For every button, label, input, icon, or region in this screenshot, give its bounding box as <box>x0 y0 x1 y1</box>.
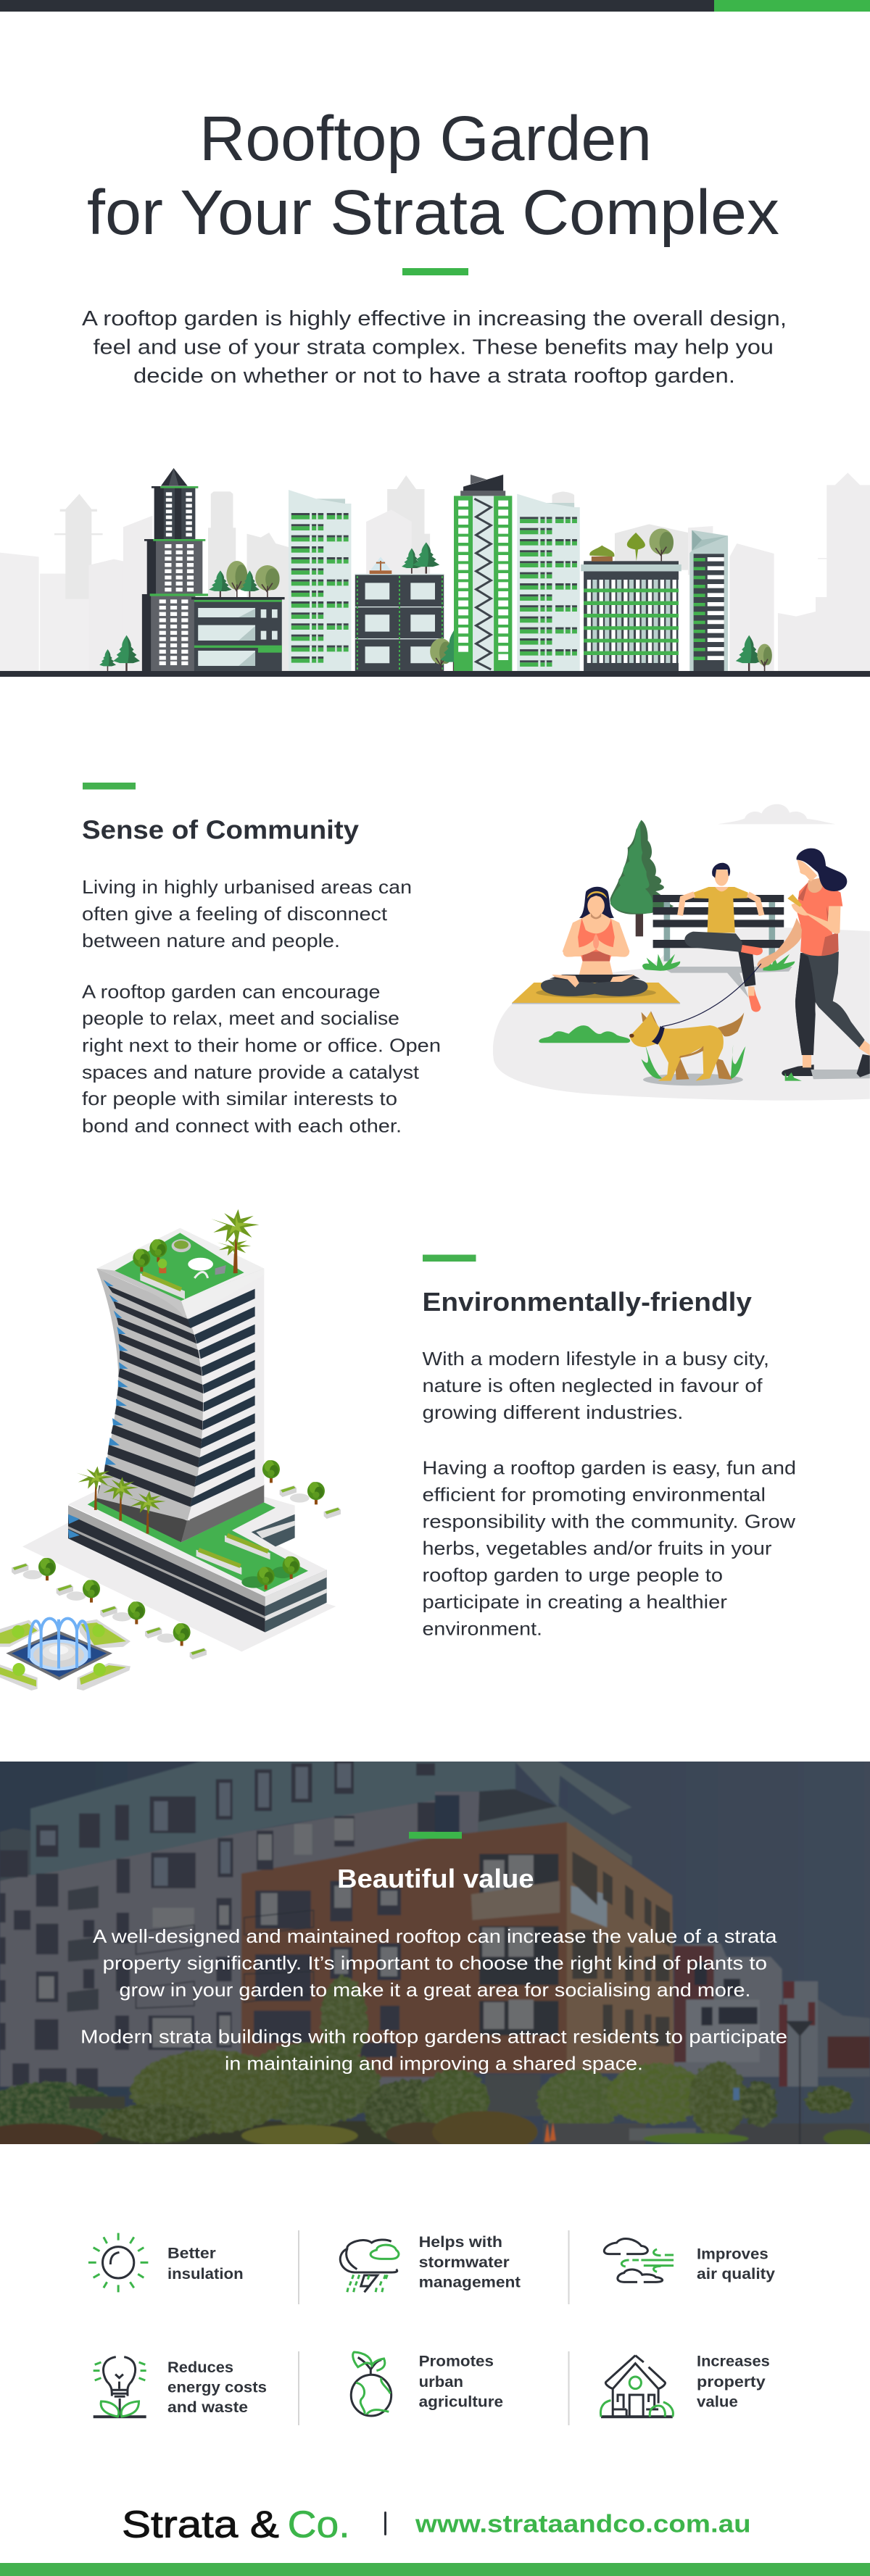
label: air quality: air quality <box>697 2265 775 2283</box>
paragraph text: rooftop garden to urge people to <box>422 1564 723 1585</box>
label: energy costs <box>167 2359 267 2416</box>
isometric building illustration <box>0 1209 341 1691</box>
accent bar <box>423 1255 476 1262</box>
label: air quality <box>697 2245 775 2283</box>
woman walking dog <box>758 849 870 1081</box>
accent bar <box>409 1832 462 1839</box>
paragraph text: people to relax, meet and socialise <box>82 1007 399 1029</box>
yoga woman <box>536 887 656 998</box>
dark building C with fountain <box>355 542 467 671</box>
paragraph text: between nature and people. <box>82 930 340 951</box>
street trees and planters <box>12 1460 341 1659</box>
paragraph text: With a modern lifestyle in a busy city, <box>422 1348 769 1370</box>
paragraph text: Modern strata buildings with rooftop gardens attract residents to participate <box>80 2026 787 2048</box>
paragraph text: A well-designed and maintained rooftop can increase the value of a strata <box>93 1925 777 1947</box>
foliage left <box>0 1977 457 2146</box>
tower A <box>142 468 208 671</box>
icon: light bulb plant <box>94 2357 146 2417</box>
paragraph text: Living in highly urbanised areas can <box>82 876 412 898</box>
paragraph text: for people with similar interests to <box>82 1088 397 1109</box>
label: energy costs: energy costs <box>167 2379 267 2396</box>
tower right face <box>183 1268 264 1521</box>
icon: air quality <box>604 2239 674 2282</box>
roof garden <box>96 1209 264 1319</box>
title: Rooftop Garden <box>199 104 652 174</box>
label: urban agriculture: Promotes <box>419 2353 494 2370</box>
intro text: feel and use of your strata complex. These benefits may help you <box>93 336 774 359</box>
intro text <box>82 307 787 388</box>
skyline illustration <box>0 468 870 677</box>
green building D <box>454 475 512 671</box>
label: energy costs: and waste <box>167 2398 248 2416</box>
heading: Beautiful value <box>337 1864 534 1893</box>
icon: globe sprout <box>351 2352 392 2416</box>
slim building G <box>689 530 728 671</box>
pale building E <box>517 494 580 671</box>
label: urban agriculture: agriculture <box>419 2393 503 2411</box>
yoga mat <box>512 983 680 1003</box>
shadows <box>660 967 792 998</box>
label: better insulation: Better <box>167 2245 216 2262</box>
foliage right <box>420 2062 853 2135</box>
label: better insulation: insulation <box>167 2265 244 2283</box>
dividers <box>299 2230 568 2425</box>
footer logo: Strata & <box>122 2504 279 2546</box>
man on bench <box>680 863 763 1012</box>
tower base <box>96 1485 187 1543</box>
paragraph text: spaces and nature provide a catalyst <box>82 1061 420 1083</box>
striped building F with roof plants <box>581 528 682 671</box>
podium palms and planters <box>76 1467 300 1590</box>
low building with roof trees <box>191 561 285 671</box>
shrub <box>539 1025 630 1043</box>
panel: environmentally friendly <box>422 1255 796 1639</box>
label: urban agriculture <box>419 2353 503 2411</box>
street trees <box>99 635 772 671</box>
paragraph text: A rooftop garden can encourage <box>82 981 380 1003</box>
label: air quality: Improves <box>697 2245 768 2262</box>
bench grass <box>642 954 795 971</box>
paragraph text: participate in creating a healthier <box>422 1591 727 1613</box>
fountain <box>0 1619 130 1691</box>
paragraph text: grow in your garden to make it a great area for socialising and more. <box>119 1979 751 2001</box>
icon: insulation sun <box>88 2233 148 2292</box>
heading: Environmentally-friendly <box>422 1287 752 1317</box>
label: urban agriculture: urban <box>419 2373 463 2390</box>
label: stormwater <box>419 2233 521 2291</box>
accent bar <box>83 783 136 790</box>
label: stormwater: management <box>419 2274 521 2291</box>
paragraph text: efficient for promoting environmental <box>422 1484 766 1506</box>
paragraph text: often give a feeling of disconnect <box>82 903 388 925</box>
tower left face <box>96 1268 204 1521</box>
paragraph text: growing different industries. <box>422 1401 683 1423</box>
park illustration <box>493 804 870 1101</box>
label: better insulation <box>167 2245 244 2283</box>
label: stormwater: Helps with <box>419 2233 502 2251</box>
heading: Sense of Community <box>82 814 359 845</box>
paragraph text: right next to their home or office. Open <box>82 1035 441 1056</box>
footer logo <box>122 2504 350 2546</box>
paragraph text <box>82 876 441 1136</box>
label: property value: value <box>697 2393 738 2411</box>
icon: storm cloud <box>340 2240 399 2292</box>
panel: beautiful value photo banner <box>0 1754 870 2153</box>
panel: benefits grid <box>88 2230 775 2425</box>
paragraph text: environment. <box>422 1617 542 1639</box>
dog <box>629 1011 745 1085</box>
intro text: decide on whether or not to have a strata rooftop garden. <box>133 364 735 388</box>
left half of photo <box>0 1761 457 2151</box>
background photo of apartment buildings <box>0 1754 870 2153</box>
cloud <box>718 804 835 824</box>
ground <box>493 927 870 1101</box>
label: stormwater: stormwater <box>419 2254 510 2271</box>
paragraph text: Having a rooftop garden is easy, fun and <box>422 1456 796 1478</box>
paragraph text <box>422 1348 796 1639</box>
footer website: www.strataandco.com.au <box>415 2510 751 2538</box>
paragraph text <box>80 1925 787 2074</box>
top colour bar <box>0 0 870 12</box>
pale building B <box>289 490 351 671</box>
paragraph text: nature is often neglected in favour of <box>422 1375 763 1396</box>
title accent bar <box>402 268 468 275</box>
footer divider <box>384 2512 386 2535</box>
paragraph text: property significantly. It’s important to choose the right kind of plants to <box>103 1952 767 1974</box>
intro text: A rooftop garden is highly effective in increasing the overall design, <box>82 307 787 330</box>
footer green bar <box>0 2563 870 2576</box>
dog lead <box>662 964 761 1027</box>
podium roof <box>68 1488 327 1597</box>
paragraph text: herbs, vegetables and/or fruits in your <box>422 1538 772 1559</box>
podium walls <box>68 1506 327 1633</box>
paragraph text: in maintaining and improving a shared space. <box>225 2052 643 2074</box>
panel: sense of community <box>82 783 441 1136</box>
pine tree <box>610 820 674 936</box>
label: property value: Increases <box>697 2353 770 2370</box>
icon: house <box>600 2356 673 2417</box>
title: for Your Strata Complex <box>87 178 779 248</box>
label: energy costs: Reduces <box>167 2359 233 2376</box>
ground line <box>0 671 870 677</box>
right half of photo <box>420 1761 870 2153</box>
footer logo: Co. <box>288 2504 350 2546</box>
base plate <box>22 1522 336 1651</box>
bench <box>653 895 784 962</box>
label: property value <box>697 2353 770 2411</box>
paragraph text: responsibility with the community. Grow <box>422 1510 795 1532</box>
label: property value: property <box>697 2373 766 2390</box>
title <box>87 104 779 248</box>
background silhouettes <box>0 472 870 671</box>
paragraph text: bond and connect with each other. <box>82 1114 402 1136</box>
